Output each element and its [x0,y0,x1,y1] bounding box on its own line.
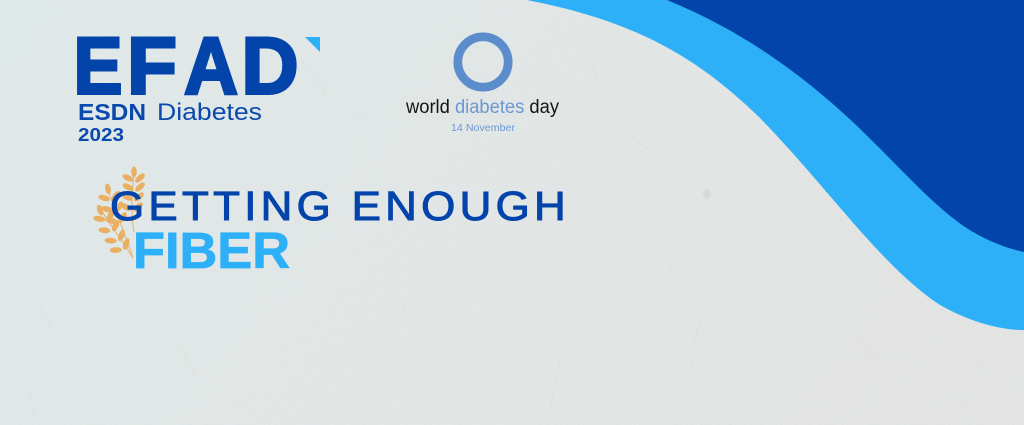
EFAD wordmark: A [184,22,238,112]
logo corner triangle [305,37,320,52]
ESDN label: ESDN [78,99,146,125]
light blue wave [527,0,1024,330]
logo: EFAD ESDN Diabetes 2023 [74,22,320,145]
EFAD wordmark: E [74,22,122,112]
year: 2023 [78,125,124,145]
date: 14 November [451,122,516,134]
blue circle [458,37,508,87]
world diabetes day wordmark: world diabetes day [405,97,559,118]
Diabetes label: Diabetes [157,99,262,126]
title [110,183,570,279]
dark blue wave [667,0,1024,252]
heading line: Fiber: FIBER [133,222,290,279]
EFAD wordmark: F [127,22,177,112]
icon: wheat [91,166,146,259]
heading line: Getting Enough: GETTING ENOUGH [110,183,570,229]
EFAD wordmark [74,22,298,112]
EFAD wordmark: D [242,22,298,112]
logo: world diabetes day [405,37,559,134]
